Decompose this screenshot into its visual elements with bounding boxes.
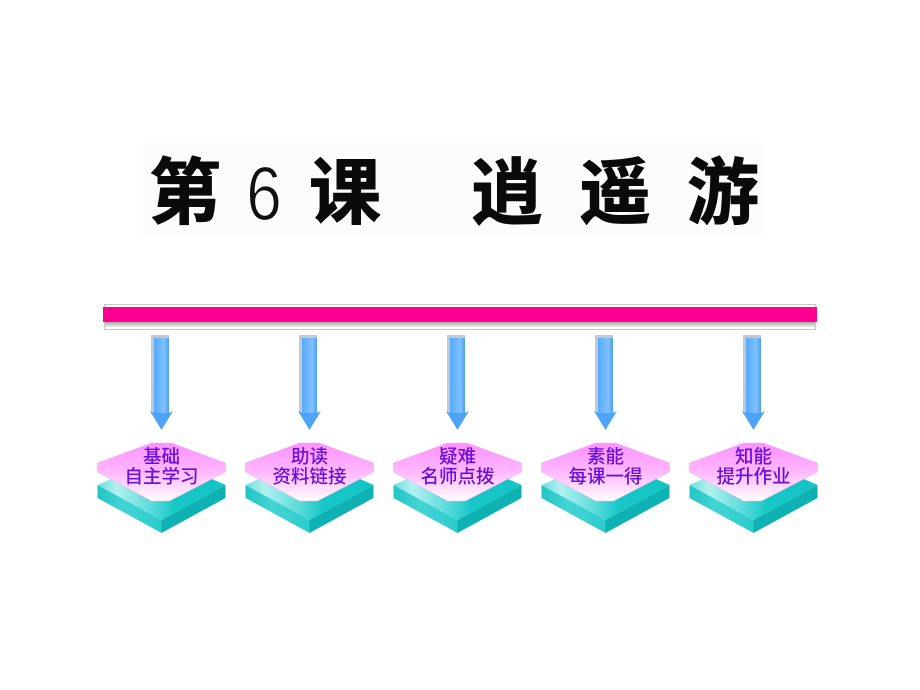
box 1: 基础 自主学习: 基础 — [143, 446, 180, 467]
box 4: 素能 每课一得 — [542, 443, 670, 533]
box 5: 知能 提升作业: 提升作业 — [716, 466, 791, 487]
title banner: 课 — [309, 154, 381, 234]
title banner: 遥 — [579, 154, 651, 234]
title banner: 逍 — [471, 154, 543, 234]
arrow 1 — [150, 335, 173, 430]
arrow 2 — [298, 335, 321, 430]
title banner: 6 — [246, 151, 282, 236]
box 3: 疑难 名师点拨 — [394, 443, 522, 533]
box 5: 知能 提升作业 — [690, 443, 818, 533]
box 1: 基础 自主学习: 自主学习 — [124, 466, 199, 487]
box 3: 疑难 名师点拨: 疑难 — [439, 446, 476, 467]
box 2: 助读 资料链接: 资料链接 — [272, 466, 347, 487]
title banner — [143, 143, 763, 236]
box 2: 助读 资料链接: 助读 — [291, 446, 328, 467]
title banner: 游 — [687, 154, 759, 234]
pink horizontal bar — [103, 304, 817, 330]
box 4: 素能 每课一得: 每课一得 — [568, 466, 643, 487]
arrow 5 — [742, 335, 765, 430]
box 4: 素能 每课一得: 素能 — [587, 446, 624, 467]
box 2: 助读 资料链接 — [246, 443, 374, 533]
arrow 3 — [446, 335, 469, 430]
box 3: 疑难 名师点拨: 名师点拨 — [420, 466, 495, 487]
box 5: 知能 提升作业: 知能 — [735, 446, 772, 467]
arrow 4 — [594, 335, 617, 430]
title banner: 第 — [149, 154, 221, 234]
box 1: 基础 自主学习 — [98, 443, 226, 533]
